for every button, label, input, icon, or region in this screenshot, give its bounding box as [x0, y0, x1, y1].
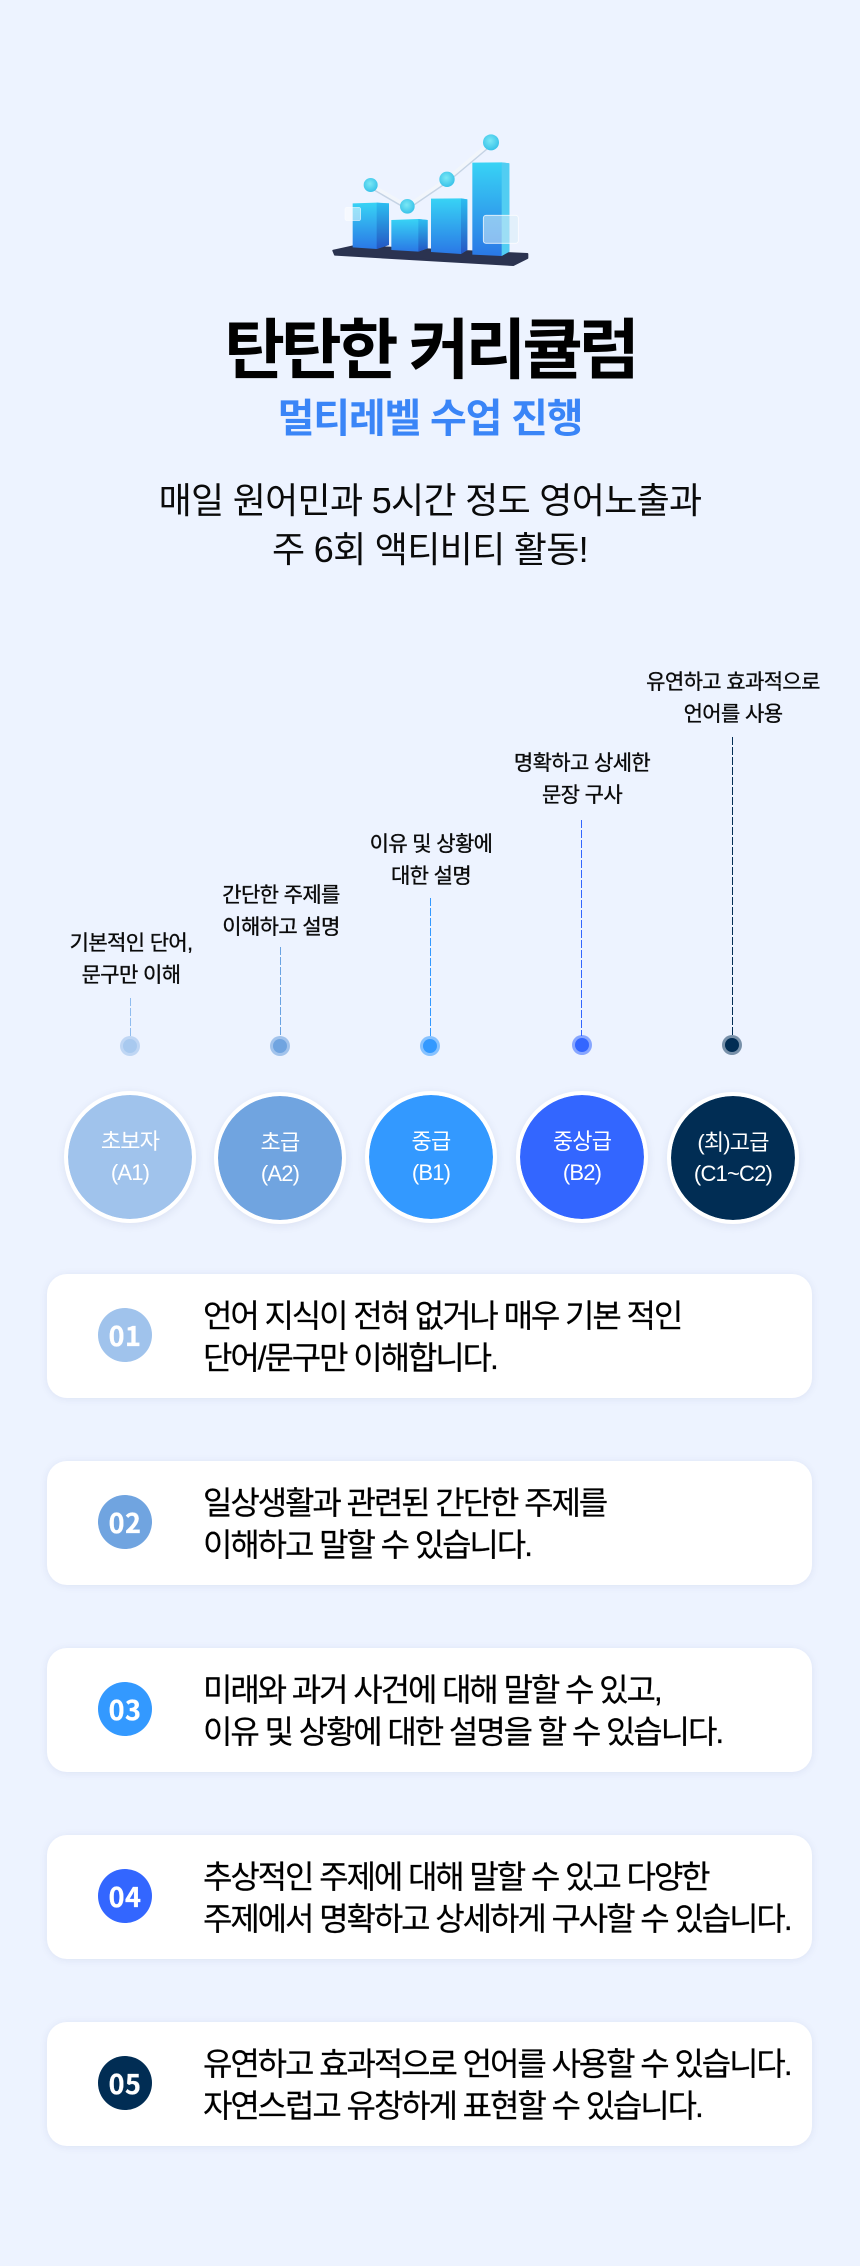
level description: upper intermediate: [514, 752, 650, 807]
leader line A2: [280, 947, 281, 1037]
badge 05: [98, 2056, 152, 2110]
timeline dot C: [722, 1035, 742, 1055]
card 01 text: 단어/문구만 이해합니다.: [203, 1340, 497, 1376]
card 04 text: [203, 1859, 791, 1936]
icon: 3D bar chart with trend line: [332, 134, 528, 266]
level circle: beginner A1: (A1): [111, 1160, 149, 1184]
card 05 text: 유연하고 효과적으로 언어를 사용할 수 있습니다.: [203, 2046, 791, 2082]
card 04 text: 주제에서 명확하고 상세하게 구사할 수 있습니다.: [203, 1900, 791, 1936]
level description: upper intermediate: 명확하고 상세한: [514, 752, 650, 775]
level circle: elementary A2: 초급: [261, 1130, 299, 1155]
level circle: intermediate B1: 중급: [412, 1129, 450, 1154]
badge 03: [98, 1682, 152, 1736]
level description: intermediate: [370, 833, 492, 888]
leader line C: [732, 737, 733, 1037]
card 03: [47, 1648, 812, 1772]
card 05 text: [203, 2046, 791, 2124]
level circle: upper intermediate B2: (B2): [563, 1160, 601, 1184]
badge 05: 05: [109, 2063, 141, 2102]
title: 탄탄한 커리큘럼: [224, 313, 636, 387]
card 04: [47, 1835, 812, 1959]
card 01 text: [203, 1298, 681, 1376]
card 03 text: 이유 및 상황에 대한 설명을 할 수 있습니다.: [203, 1714, 722, 1750]
timeline dot B2: [572, 1035, 592, 1055]
level description: advanced: 언어를 사용: [684, 703, 782, 726]
card 01 text: 언어 지식이 전혀 없거나 매우 기본 적인: [203, 1298, 681, 1334]
badge 01: 01: [109, 1315, 141, 1354]
card 03 text: 미래와 과거 사건에 대해 말할 수 있고,: [203, 1672, 661, 1708]
level description: intermediate: 대한 설명: [391, 865, 471, 888]
card 02: [47, 1461, 812, 1585]
badge 02: 02: [109, 1502, 141, 1541]
card 02 text: 이해하고 말할 수 있습니다.: [203, 1526, 531, 1562]
level circle: upper intermediate B2: [516, 1091, 648, 1223]
badge 04: 04: [109, 1876, 141, 1915]
card 01: [47, 1274, 812, 1398]
level description: upper intermediate: 문장 구사: [542, 784, 622, 807]
level circle: beginner A1: [64, 1091, 196, 1223]
level description: elementary: 이해하고 설명: [222, 916, 340, 939]
intro text: [159, 480, 701, 570]
level circle: upper intermediate B2: 중상급: [553, 1129, 611, 1154]
level description: beginner: 기본적인 단어,: [70, 932, 192, 955]
level description: beginner: [70, 932, 192, 987]
card 02 text: 일상생활과 관련된 간단한 주제를: [203, 1485, 606, 1521]
subtitle: 멀티레벨 수업 진행: [278, 397, 582, 441]
level description: advanced: [646, 671, 820, 726]
level circle: advanced C1~C2: [667, 1092, 799, 1224]
level description: intermediate: 이유 및 상황에: [370, 833, 492, 856]
card 03 text: [203, 1672, 722, 1750]
level circle: beginner A1: 초보자: [101, 1129, 159, 1154]
level circle: intermediate B1: (B1): [412, 1160, 450, 1184]
level circle: advanced C1~C2: (C1~C2): [694, 1160, 772, 1186]
intro text: 주 6회 액티비티 활동!: [272, 529, 588, 570]
level circle: advanced C1~C2: (최)고급: [697, 1130, 769, 1155]
level description: elementary: [222, 884, 340, 939]
badge 01: [98, 1308, 152, 1362]
card 05: [47, 2022, 812, 2146]
badge 04: [98, 1869, 152, 1923]
level circle: intermediate B1: [365, 1091, 497, 1223]
level circle: elementary A2: (A2): [261, 1160, 299, 1186]
leader line B2: [581, 820, 582, 1036]
badge 02: [98, 1495, 152, 1549]
timeline dot A1: [120, 1036, 140, 1056]
level description: advanced: 유연하고 효과적으로: [646, 671, 820, 694]
card 02 text: [203, 1485, 607, 1562]
card 04 text: 추상적인 주제에 대해 말할 수 있고 다양한: [203, 1859, 709, 1895]
level description: beginner: 문구만 이해: [82, 964, 180, 987]
badge 03: 03: [109, 1689, 141, 1728]
timeline dot A2: [270, 1036, 290, 1056]
level description: elementary: 간단한 주제를: [222, 884, 340, 907]
leader line B1: [430, 898, 431, 1038]
leader line A1: [130, 998, 131, 1038]
level circle: elementary A2: [214, 1092, 346, 1224]
timeline dot B1: [420, 1036, 440, 1056]
card 05 text: 자연스럽고 유창하게 표현할 수 있습니다.: [203, 2088, 702, 2124]
intro text: 매일 원어민과 5시간 정도 영어노출과: [159, 480, 701, 521]
